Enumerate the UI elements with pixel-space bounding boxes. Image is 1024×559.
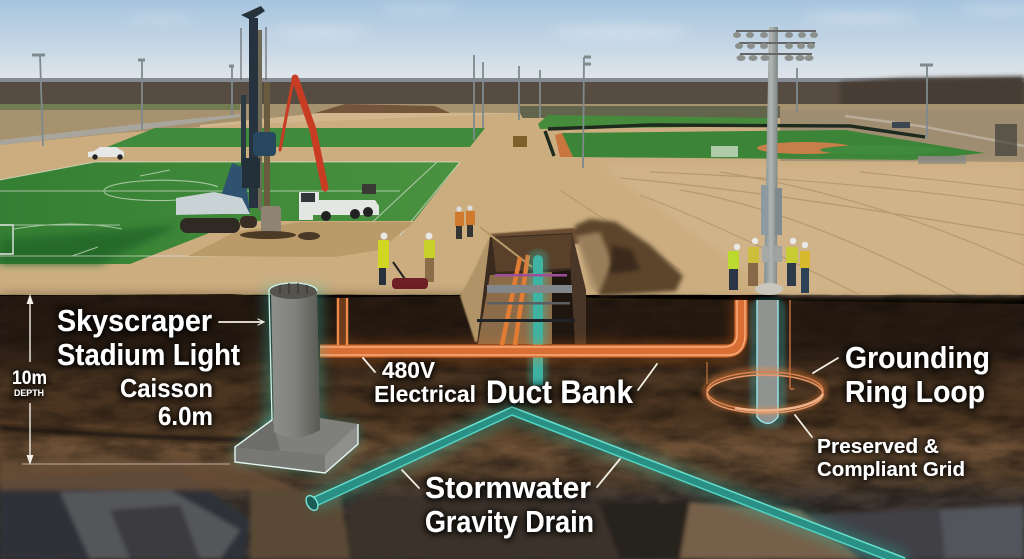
label: Preserved & Compliant Grid: Preserved & — [817, 436, 939, 458]
rock layer — [0, 460, 1024, 559]
stormwater gravity drain — [304, 407, 905, 559]
label: 480V Electrical — [374, 357, 476, 407]
spoil pile — [488, 219, 683, 296]
surveyors on the surface — [378, 205, 475, 289]
underground soil — [0, 294, 1024, 559]
baseball fields — [513, 115, 1017, 164]
graded dirt with tread lines — [560, 165, 1024, 295]
light pole underground section — [750, 298, 786, 428]
upper soccer field — [107, 128, 485, 147]
trench pipes — [477, 274, 575, 322]
background light poles — [32, 55, 933, 168]
distant fields — [0, 104, 1024, 166]
sand ground base — [0, 113, 1024, 295]
label: Skyscraper Stadium Light Caisson 6.0m — [57, 303, 240, 431]
dirt patch around rig — [188, 222, 414, 257]
label: Duct Bank: Duct Bank — [486, 374, 633, 410]
trench — [460, 227, 586, 390]
teal conduit in trench — [528, 250, 548, 390]
label: Skyscraper Stadium Light Caisson 6.0m: Caisson — [120, 373, 213, 403]
label: 480V Electrical: 480V — [382, 357, 436, 383]
clouds — [125, 6, 1024, 38]
label: Preserved & Compliant Grid — [817, 436, 965, 481]
label: Grounding Ring Loop — [845, 340, 990, 409]
red concrete pump boom — [280, 78, 325, 188]
label: Stormwater Gravity Drain — [425, 470, 594, 539]
label: Grounding Ring Loop: Grounding — [845, 340, 990, 375]
label: 10m depth: 10m — [12, 368, 47, 389]
concrete truck — [299, 184, 379, 221]
label: Stormwater Gravity Drain: Stormwater — [425, 470, 591, 505]
main soccer field — [0, 162, 460, 264]
label: Stormwater Gravity Drain: Gravity Drain — [425, 504, 594, 539]
label: 480V Electrical: Electrical — [374, 381, 476, 407]
leader lines — [219, 319, 838, 488]
grounding ring loop — [706, 300, 824, 413]
label: Skyscraper Stadium Light Caisson 6.0m: 6.0m — [158, 401, 213, 431]
stadium light tower — [733, 27, 818, 295]
piling rig — [176, 6, 320, 240]
label: Skyscraper Stadium Light Caisson 6.0m: Skyscraper — [57, 303, 212, 338]
background: sky — [0, 0, 1024, 82]
label: Preserved & Compliant Grid: Compliant Grid — [817, 459, 965, 481]
label: Skyscraper Stadium Light Caisson 6.0m: Stadium Light — [57, 337, 240, 372]
wooden plank — [480, 227, 532, 267]
label: Grounding Ring Loop: Ring Loop — [845, 374, 985, 409]
electrical duct bank — [320, 298, 745, 355]
distant tree line — [0, 76, 1024, 112]
soccer goal — [0, 225, 13, 254]
caisson foundation — [235, 283, 358, 474]
workers at tower base — [728, 238, 810, 293]
label: 10m depth — [12, 368, 47, 398]
vehicles in distance — [88, 122, 910, 160]
label: 10m depth: DEPTH — [14, 388, 44, 398]
orange conduits in trench — [502, 255, 528, 345]
depth dimension marker — [22, 294, 230, 465]
